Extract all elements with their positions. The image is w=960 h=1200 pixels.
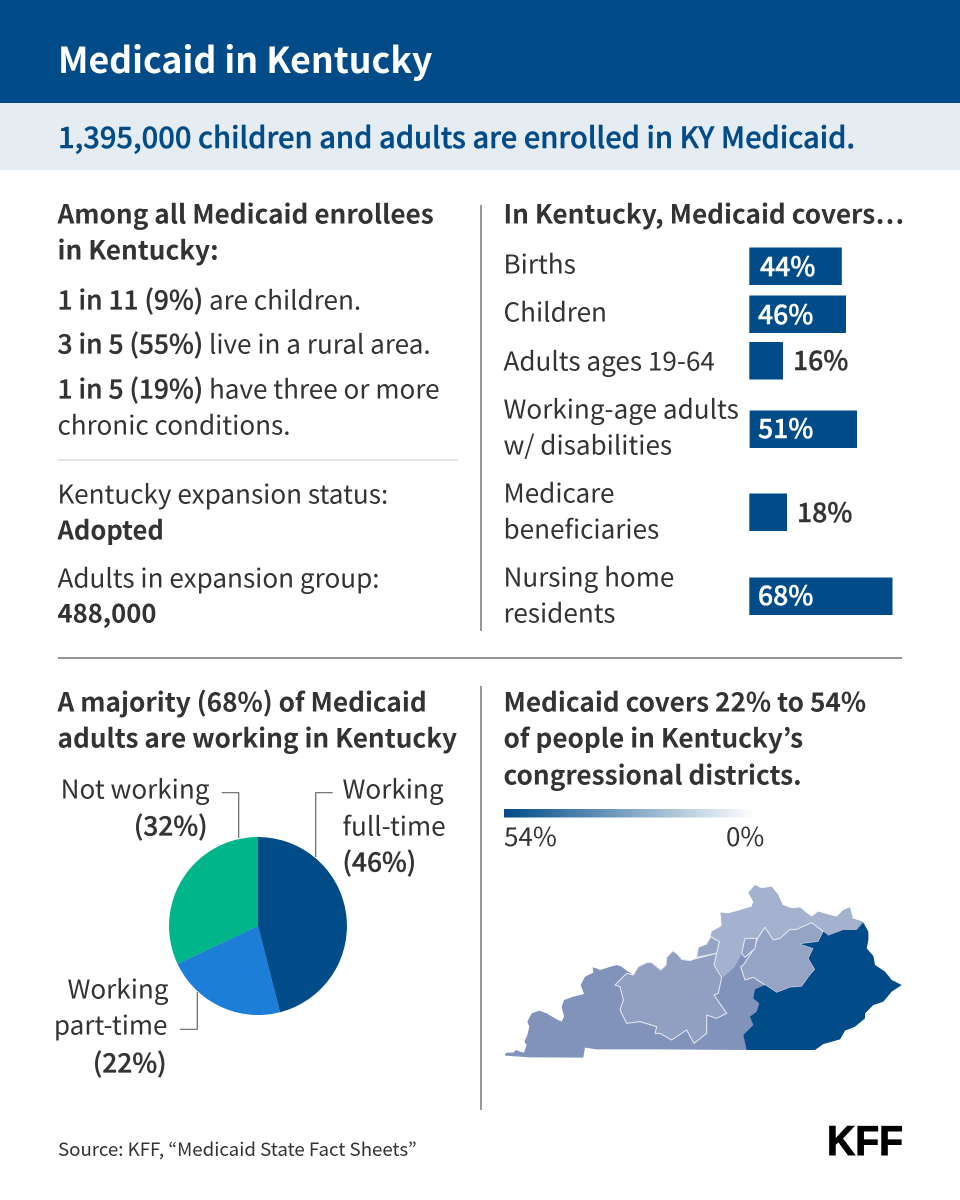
bar: nursing home — [504, 556, 892, 630]
bar: births — [504, 243, 842, 285]
pie chart — [169, 837, 347, 1015]
title banner — [0, 0, 960, 103]
heading: districts: congressional districts. — [504, 754, 802, 792]
subtitle banner — [0, 103, 960, 170]
bar: medicare: beneficiaries — [504, 508, 659, 546]
label: part-time: part-time — [54, 1004, 168, 1042]
bar: children: 46% — [758, 293, 813, 332]
bar: nursing home: 68% — [758, 574, 813, 613]
label: full-time: Working — [342, 768, 444, 806]
bar: adults — [504, 339, 848, 380]
heading: work status: adults are working in Kentucky — [58, 717, 457, 755]
bar: medicare — [504, 472, 852, 546]
bar: nursing home: residents — [504, 592, 616, 630]
subtitle banner: 1,395,000 children and adults are enrolled in KY Medicaid. — [58, 115, 855, 157]
panel: Medicaid coverage bar chart — [504, 193, 904, 630]
label: full-time: full-time — [342, 805, 446, 843]
bar: disabilities: 51% — [758, 407, 813, 446]
label: part-time: Working — [67, 968, 168, 1006]
label: part-time: (22%) — [93, 1041, 166, 1080]
heading: enrollees: in Kentucky: — [58, 229, 219, 267]
title banner: Medicaid in Kentucky — [58, 33, 433, 84]
map legend — [504, 809, 764, 854]
bar: medicare: Medicare — [504, 472, 615, 510]
expansion status: Kentucky expansion status: — [58, 473, 388, 511]
expansion group: Adults in expansion group: — [58, 557, 380, 595]
bar: disabilities — [504, 388, 857, 462]
bar: disabilities: w/ disabilities — [504, 424, 672, 462]
fact: rural: 3 in 5 (55%) live in a rural area. — [58, 322, 431, 361]
map of Kentucky — [505, 885, 902, 1058]
bar: adults: 16% — [793, 339, 848, 378]
expansion status: Adopted — [56, 510, 164, 547]
heading: work status: A majority (68%) of Medicaid — [58, 681, 427, 719]
fact: chronic conditions: chronic conditions. — [58, 404, 291, 442]
label: full-time: (46%) — [342, 840, 416, 879]
bar: births: Births — [504, 243, 576, 281]
KFF logo: KFF — [827, 1117, 903, 1164]
panel: enrollee facts — [56, 193, 458, 630]
bar: children — [504, 291, 846, 333]
source note: Source: KFF, “Medicaid State Fact Sheets” — [58, 1135, 417, 1162]
expansion group: 488,000 — [58, 593, 156, 630]
bar: disabilities: Working-age adults — [504, 388, 739, 426]
fact: children: 1 in 11 (9%) are children. — [58, 278, 361, 317]
label: not working: (32%) — [134, 804, 208, 843]
panel: work status pie chart — [54, 681, 457, 1080]
bar: adults: Adults ages 19-64 — [504, 340, 715, 378]
panel: congressional district map — [504, 681, 902, 1058]
bar: births: 44% — [760, 245, 815, 284]
heading: enrollees: Among all Medicaid enrollees — [58, 193, 434, 231]
heading: coverage: In Kentucky, Medicaid covers… — [504, 193, 904, 231]
fact: chronic conditions: 1 in 5 (19%) have three or more — [58, 367, 440, 406]
bar: nursing home: Nursing home — [504, 556, 674, 594]
bar: children: Children — [504, 291, 607, 329]
bar: medicare: 18% — [797, 491, 852, 530]
label: not working: Not working — [61, 768, 210, 806]
map legend: 54% — [504, 817, 557, 854]
map legend: 0% — [726, 817, 764, 854]
heading: districts: of people in Kentucky’s — [504, 717, 803, 755]
heading: districts: Medicaid covers 22% to 54% — [504, 681, 866, 719]
